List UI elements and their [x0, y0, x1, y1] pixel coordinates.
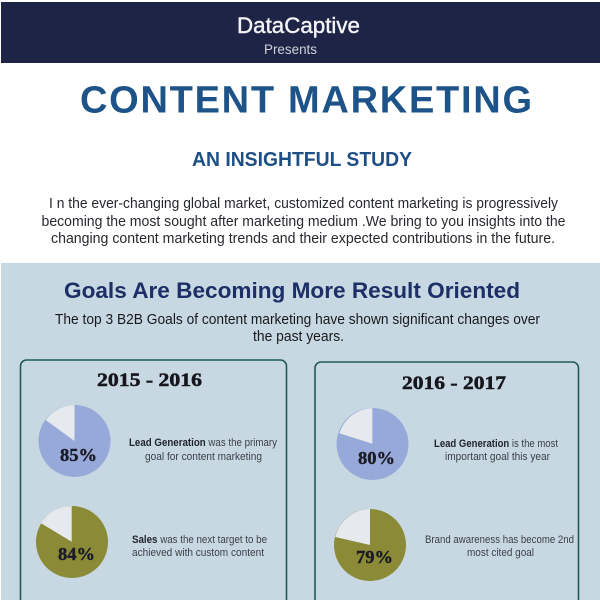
- description: lead generation: important goal this year: [445, 451, 550, 463]
- description: brand awareness: Brand awareness has become 2nd: [425, 534, 574, 546]
- panel: goals section: [1, 263, 600, 600]
- header banner: [1, 2, 600, 63]
- year heading: 2015 - 2016: [97, 370, 202, 391]
- panel: 2016-2017: [315, 362, 578, 600]
- intro paragraph: I n the ever-changing global market, customized content marketing is progressively: [49, 195, 558, 212]
- description: lead generation: [129, 437, 277, 463]
- section heading: Goals Are Becoming More Result Oriented: [64, 278, 520, 303]
- description: lead generation: goal for content marketing: [145, 451, 262, 463]
- description: lead generation: Lead Generation was the primary: [129, 437, 277, 449]
- pie chart: 80%: [336, 408, 408, 480]
- pie chart: 80%: 80%: [358, 448, 395, 468]
- description: sales: [132, 534, 267, 559]
- description: sales: achieved with custom content: [132, 547, 264, 559]
- description: sales: Sales was the next target to be: [132, 534, 267, 546]
- intro paragraph: changing content marketing trends and their expected contributions in the future.: [51, 230, 555, 247]
- pie chart: 85%: 85%: [60, 445, 97, 465]
- pie chart: 79%: 79%: [356, 547, 393, 567]
- description: lead generation: Lead Generation is the most: [434, 438, 558, 450]
- panel: 2015-2016: [20, 360, 286, 600]
- title: CONTENT MARKETING: [80, 80, 532, 122]
- subtitle: AN INSIGHTFUL STUDY: [192, 148, 412, 171]
- presents label: Presents: [264, 42, 317, 57]
- description: brand awareness: most cited goal: [467, 547, 534, 559]
- section intro text: the past years.: [253, 328, 344, 345]
- pie chart: 84%: [36, 506, 108, 578]
- section intro text: The top 3 B2B Goals of content marketing have shown significant changes over: [55, 311, 540, 328]
- description: lead generation: [434, 438, 558, 463]
- year heading: 2016 - 2017: [402, 373, 507, 394]
- pie chart: 84%: 84%: [58, 544, 95, 564]
- pie chart: 79%: [334, 509, 406, 581]
- intro paragraph: [42, 195, 566, 247]
- pie chart: 85%: [38, 405, 110, 477]
- intro paragraph: becoming the most sought after marketing medium .We bring to you insights into the: [42, 213, 566, 230]
- brand name: DataCaptive: [237, 13, 360, 38]
- description: brand awareness: [425, 534, 574, 559]
- section intro text: [55, 311, 540, 345]
